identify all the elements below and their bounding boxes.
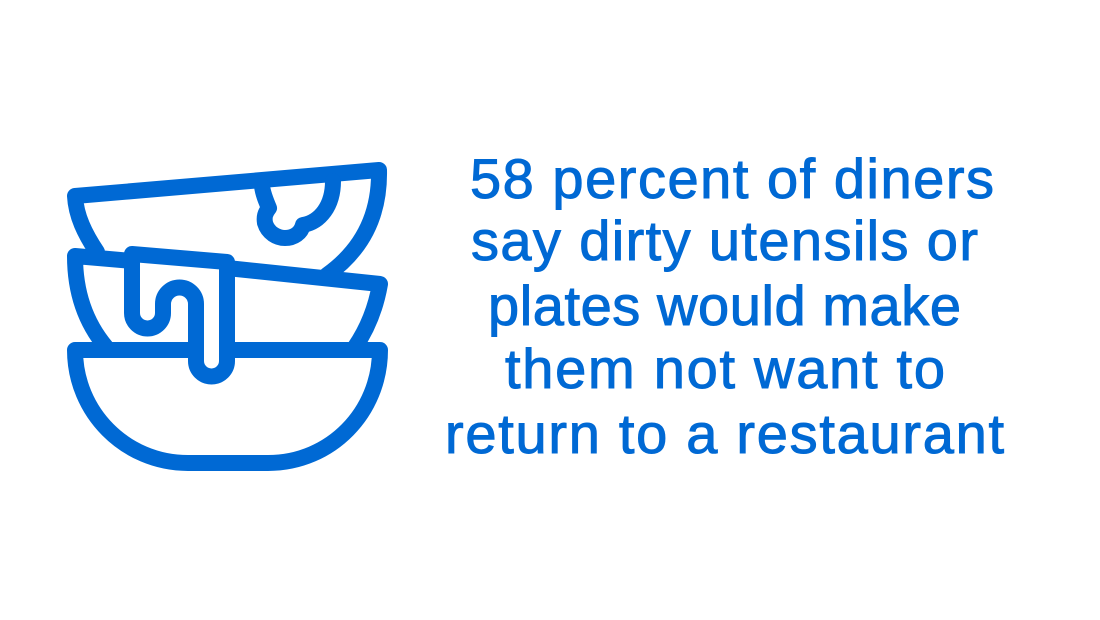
text line 3: plates would make — [488, 274, 961, 337]
icon part: middle bowl — [75, 256, 380, 347]
text line 5: return to a restaurant — [445, 402, 1004, 465]
icon part: top bowl — [75, 170, 379, 275]
icon: stack of dirty bowls — [75, 170, 380, 463]
icon part: dripping cloth — [132, 254, 227, 376]
text line 1: 58 percent of diners — [470, 147, 994, 210]
icon part: bottom bowl — [75, 350, 380, 463]
text line 2: say dirty utensils or — [471, 209, 978, 272]
icon part: stain on top bowl — [262, 181, 333, 238]
text line 4: them not want to — [505, 337, 945, 400]
text block: statistic — [445, 147, 1004, 465]
